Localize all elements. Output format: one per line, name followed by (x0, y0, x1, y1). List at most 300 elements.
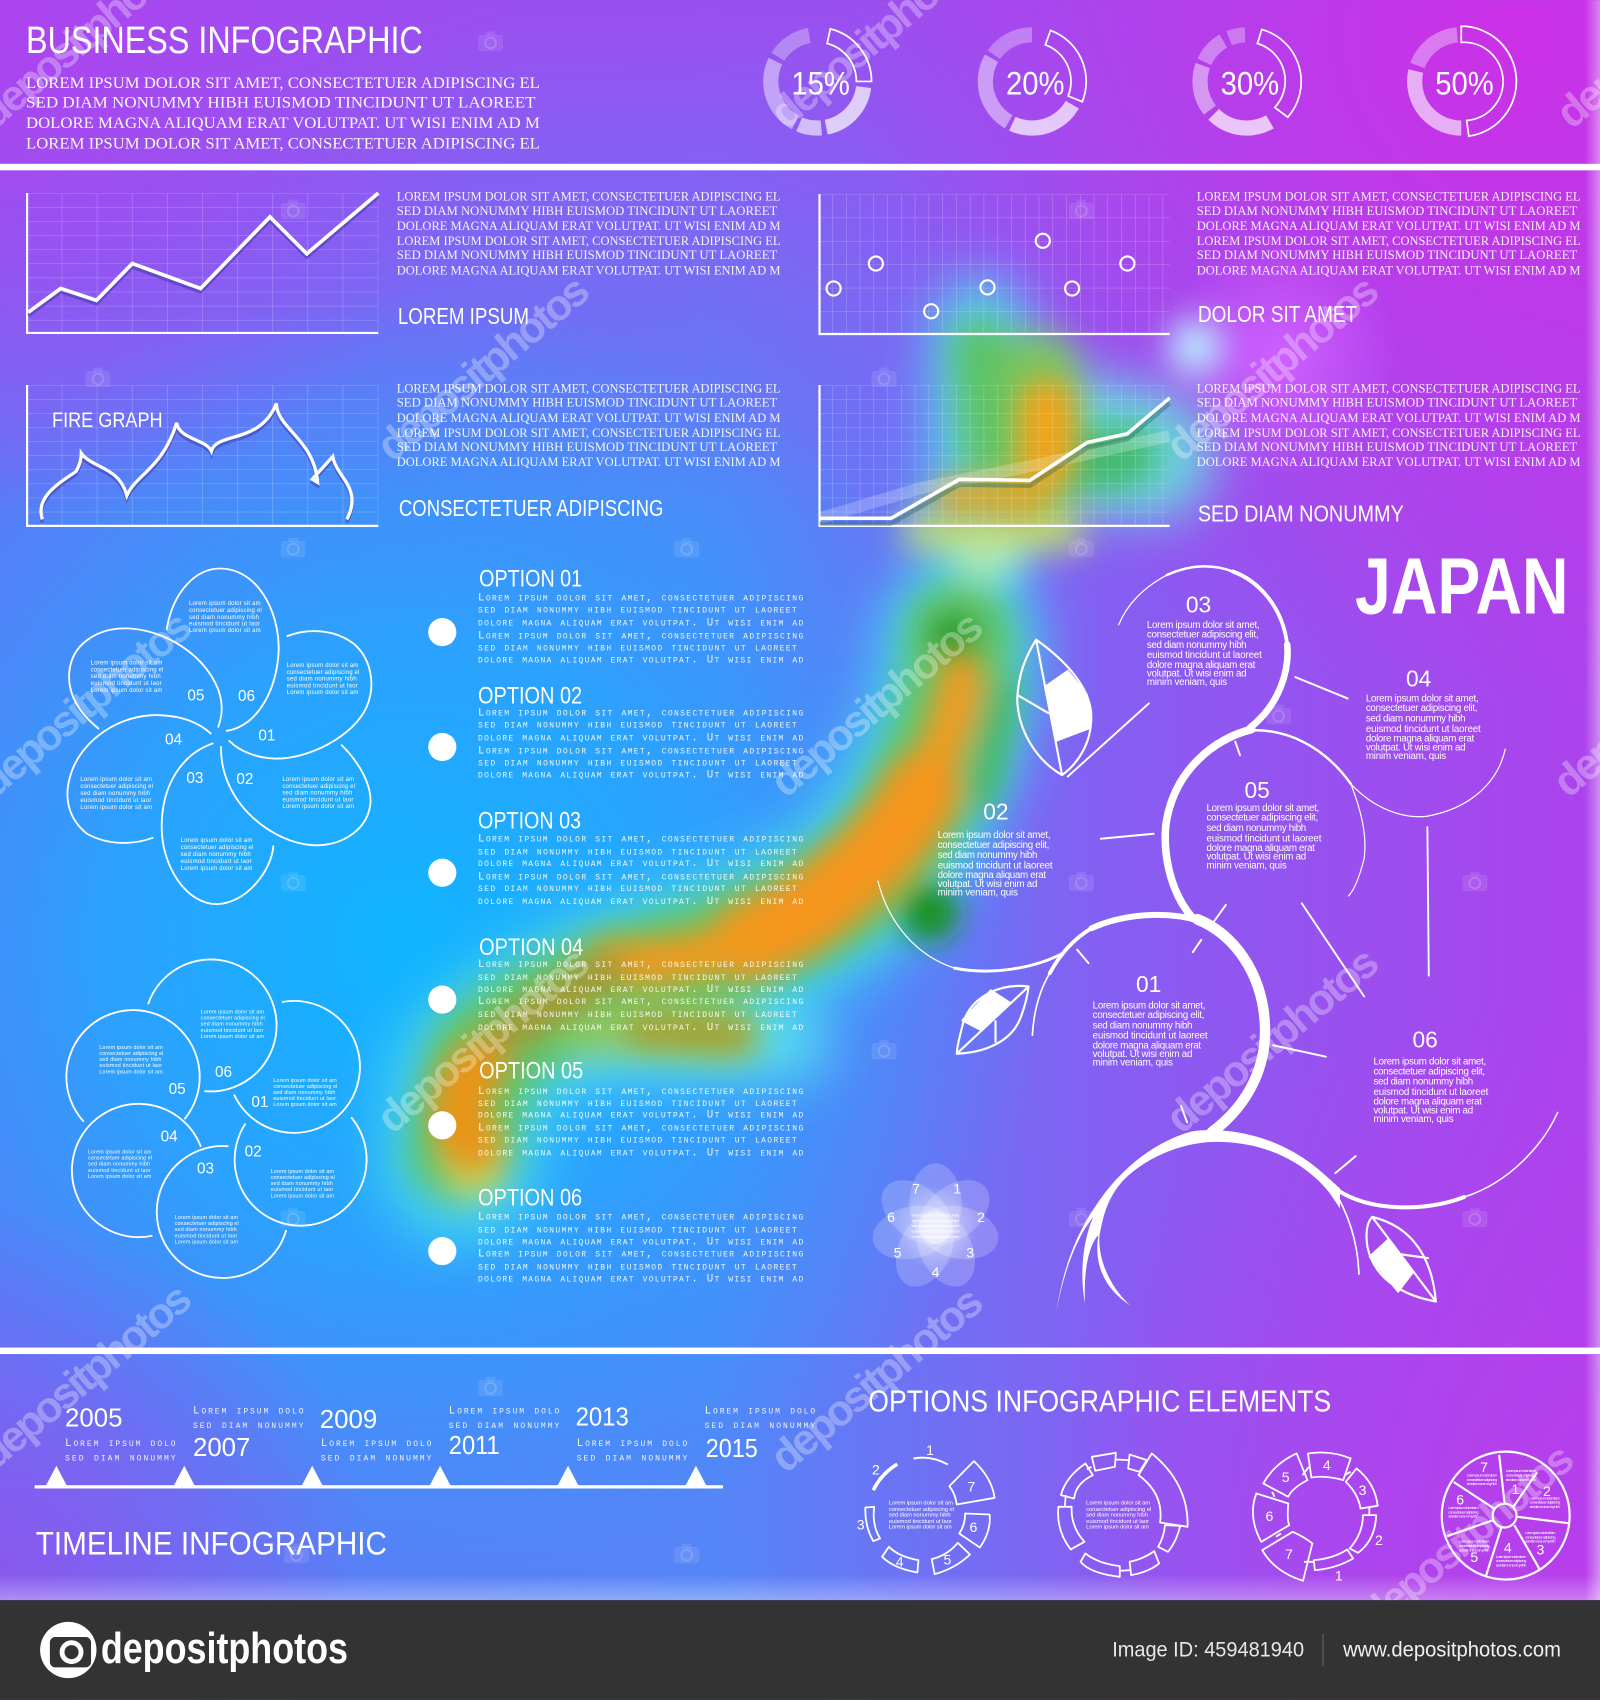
donut 30%: 30% (1221, 65, 1279, 101)
circle flower diagram: Lorem ipsum dolor sit am (201, 1010, 265, 1016)
option 01: sed diam nonummy hibh euismod tincidunt ut laoreet (478, 643, 797, 655)
circle flower diagram: 05 (169, 1081, 186, 1098)
text block 1: SED DIAM NONUMMY HIBH EUISMOD TINCIDUNT UT LAOREET (397, 247, 777, 262)
option 01: sed diam nonummy hibh euismod tincidunt ut laoreet (478, 605, 797, 617)
text block 1: DOLORE MAGNA ALIQUAM ERAT VOLUTPAT. UT WISI ENIM AD M (397, 262, 781, 277)
tree text 03: sed diam nonummy hibh (1147, 640, 1247, 651)
option ring 3: 4 (1323, 1457, 1331, 1473)
donut 50%: 50% (1435, 65, 1494, 101)
option 03: Lorem ipsum dolor sit amet, consectetuer adipiscing (478, 871, 803, 883)
circle flower diagram: euismod tincidunt ut laor (175, 1234, 238, 1240)
option 01: Lorem ipsum dolor sit amet, consectetuer adipiscing (478, 631, 803, 643)
circle flower diagram: euismod tincidunt ut laor (88, 1168, 151, 1174)
website: www.depositphotos.com (1342, 1637, 1561, 1662)
petal flower diagram: Lorem ipsum dolor sit am (287, 690, 358, 696)
timeline 2009: Lorem ipsum dolo (321, 1438, 432, 1450)
option ring 4: Lorem ipsum dolor sit am (1496, 1554, 1526, 1559)
icon: leaf bottom (1367, 1217, 1436, 1301)
tree text 06: Lorem ipsum dolor sit amet, (1373, 1057, 1486, 1068)
header title: BUSINESS INFOGRAPHIC (26, 20, 423, 62)
bottom divider (0, 1348, 1600, 1354)
option 02 (428, 683, 803, 781)
text block 2 (1197, 189, 1581, 277)
heat map: Japan silhouette (460, 325, 1215, 1176)
petal flower diagram: euismod tincidunt ut laor (189, 621, 260, 627)
icon: leaf top (1017, 640, 1091, 775)
donut 30% (1200, 29, 1301, 128)
option ring 4: sed diam nonummy hibh (1530, 1504, 1560, 1509)
tree text 03: minim veniam, quis (1147, 677, 1227, 688)
option 05: sed diam nonummy hibh euismod tincidunt ut laoreet (478, 1098, 797, 1110)
option 02: dolore magna aliquam erat volutpat. Ut wisi enim ad (478, 769, 803, 781)
option ring 3: 5 (1282, 1469, 1290, 1485)
tree text 03 (1147, 592, 1262, 688)
circle flower diagram: euismod tincidunt ut laor (99, 1063, 162, 1069)
timeline (35, 1402, 815, 1488)
tree text 01 (1093, 971, 1208, 1069)
icon: leaf middle (957, 986, 1029, 1054)
tree text 05: Lorem ipsum dolor sit amet, (1207, 803, 1319, 814)
option ring 4: Lorem ipsum dolor sit am (1459, 1539, 1489, 1544)
timeline 2011 (449, 1406, 560, 1460)
petal flower diagram: Lorem ipsum dolor sit am (282, 804, 354, 810)
petal flower diagram: Lorem ipsum dolor sit am (282, 777, 354, 783)
option ring 1 (857, 1442, 995, 1574)
tree text 03: 03 (1186, 592, 1211, 618)
watermarks: depositphotos (761, 1277, 992, 1482)
option ring 1: 1 (926, 1442, 934, 1458)
option ring 1: 3 (857, 1517, 865, 1533)
option 01: dolore magna aliquam erat volutpat. Ut wisi enim ad (478, 654, 803, 666)
tree text 05: consectetuer adipiscing elit, (1207, 813, 1318, 824)
option 03 (428, 807, 803, 908)
option ring 4: 5 (1470, 1549, 1478, 1565)
option ring 1: 4 (896, 1554, 904, 1570)
petal flower diagram: Lorem ipsum dolor sit am (181, 838, 252, 844)
circle flower diagram: Lorem ipsum dolor sit am (271, 1169, 335, 1175)
watermarks: depositphotos (1352, 1435, 1583, 1639)
options heading: OPTIONS INFOGRAPHIC ELEMENTS (868, 1386, 1331, 1419)
tree text 03: dolore magna aliquam erat (1147, 660, 1256, 671)
circle flower diagram: Lorem ipsum dolor sit am (201, 1034, 265, 1040)
text block 2: SED DIAM NONUMMY HIBH EUISMOD TINCIDUNT UT LAOREET (1197, 203, 1577, 218)
option 03: dolore magna aliquam erat volutpat. Ut wisi enim ad (478, 896, 803, 908)
tree text 04: dolore magna aliquam erat (1366, 734, 1475, 745)
option ring 4: consectetuer adipiscing (1525, 1534, 1556, 1539)
tree text 05 (1207, 777, 1322, 871)
timeline 2007: 2007 (193, 1432, 250, 1462)
tree text 04 (1366, 665, 1481, 762)
petal flower diagram: euismod tincidunt ut laor (282, 797, 353, 803)
tree text 02: volutpat. Ut wisi enim ad (938, 879, 1037, 890)
tree text 04: euismod tincidunt ut laoreet (1366, 724, 1481, 735)
option ring 4 (1442, 1452, 1570, 1580)
circle flower diagram: sed diam nonummy hibh (273, 1090, 335, 1096)
option 04: dolore magna aliquam erat volutpat. Ut wisi enim ad (478, 1022, 803, 1034)
circle flower diagram: Lorem ipsum dolor sit am (99, 1045, 163, 1051)
option ring 3: 6 (1265, 1508, 1273, 1524)
text block 2: DOLORE MAGNA ALIQUAM ERAT VOLUTPAT. UT WISI ENIM AD M (1197, 218, 1581, 233)
circle flower diagram: consectetuer adipiscing el (271, 1175, 335, 1181)
circle flower diagram: Lorem ipsum dolor sit am (99, 1070, 163, 1076)
text block 4: DOLORE MAGNA ALIQUAM ERAT VOLUTPAT. UT WISI ENIM AD M (1197, 454, 1581, 469)
petal flower diagram: sed diam nonummy hibh (189, 615, 259, 621)
tree text 01: sed diam nonummy hibh (1093, 1020, 1192, 1031)
text block 1: SED DIAM NONUMMY HIBH EUISMOD TINCIDUNT UT LAOREET (397, 203, 777, 218)
option 05: Lorem ipsum dolor sit amet, consectetuer adipiscing (478, 1086, 803, 1098)
petal flower diagram: consectetuer adipiscing el (80, 784, 153, 790)
tree text 04: minim veniam, quis (1366, 751, 1446, 762)
option 02: OPTION 02 (478, 683, 582, 710)
option ring 1: 5 (944, 1551, 952, 1567)
option ring 4: 3 (1536, 1542, 1544, 1558)
donut 15%: 15% (791, 65, 850, 101)
petal flower diagram: consectetuer adipiscing el (287, 670, 359, 676)
text block 4: SED DIAM NONUMMY HIBH EUISMOD TINCIDUNT UT LAOREET (1197, 395, 1577, 410)
option ring 2: consectetuer adipiscing el (1086, 1507, 1151, 1513)
tree text 06: volutpat. Ut wisi enim ad (1373, 1105, 1473, 1116)
option ring 4: Lorem ipsum dolor sit am (1467, 1473, 1497, 1478)
watermarks: depositphotos (761, 602, 992, 807)
label: dolor sit amet: DOLOR SIT AMET (1198, 301, 1357, 327)
fire graph (27, 385, 378, 526)
option ring 1: consectetuer adipiscing el (889, 1507, 954, 1513)
tree text 06 (1373, 1026, 1489, 1125)
option ring 4: Lorem ipsum dolor sit am (1506, 1468, 1536, 1473)
circle flower diagram: Lorem ipsum dolor sit am (88, 1174, 152, 1180)
small translucent flower: consectetuer adipiscing elit sed (912, 1218, 959, 1223)
tree text 03: Lorem ipsum dolor sit amet, (1147, 620, 1260, 631)
text block 4: LOREM IPSUM DOLOR SIT AMET, CONSECTETUER ADIPISCING EL (1197, 425, 1581, 440)
tree text 04: 04 (1406, 665, 1431, 691)
tree text 05: minim veniam, quis (1207, 860, 1287, 871)
option 03: dolore magna aliquam erat volutpat. Ut wisi enim ad (478, 858, 803, 870)
tree text 06: consectetuer adipiscing elit, (1373, 1066, 1485, 1077)
small translucent flower: 2 (977, 1209, 985, 1225)
option 02: dolore magna aliquam erat volutpat. Ut wisi enim ad (478, 733, 803, 745)
text block 2: LOREM IPSUM DOLOR SIT AMET, CONSECTETUER ADIPISCING EL (1197, 189, 1581, 204)
tree text 02: minim veniam, quis (938, 888, 1018, 899)
option ring 2: Lorem ipsum dolor sit am (1086, 1501, 1150, 1507)
circle flower diagram: Lorem ipsum dolor sit am (175, 1240, 239, 1246)
circle flower diagram: Lorem ipsum dolor sit am (273, 1102, 337, 1108)
tree text 06: dolore magna aliquam erat (1373, 1097, 1482, 1108)
option 02: sed diam nonummy hibh euismod tincidunt ut laoreet (478, 720, 797, 732)
tree text 06: sed diam nonummy hibh (1373, 1077, 1473, 1088)
label: consectetuer adipiscing: CONSECTETUER ADIPISCING (399, 495, 663, 521)
option 04 (428, 934, 803, 1034)
option 06: Lorem ipsum dolor sit amet, consectetuer adipiscing (478, 1212, 803, 1224)
tree text 04: sed diam nonummy hibh (1366, 714, 1466, 725)
text block 3: DOLORE MAGNA ALIQUAM ERAT VOLUTPAT. UT WISI ENIM AD M (397, 454, 781, 469)
petal flower diagram: sed diam nonummy hibh (91, 674, 161, 680)
option ring 4: sed diam nonummy hibh (1506, 1477, 1536, 1482)
option 02: Lorem ipsum dolor sit amet, consectetuer adipiscing (478, 746, 803, 758)
small translucent flower: Lorem ipsum dolor sit amet consec (912, 1212, 959, 1217)
footer bar (0, 1600, 1600, 1700)
option ring 4: 6 (1456, 1492, 1464, 1508)
tree text 01: dolore magna aliquam erat (1093, 1040, 1201, 1051)
circle flower diagram: Lorem ipsum dolor sit am (273, 1078, 337, 1084)
option ring 4: Lorem ipsum dolor sit am (1525, 1530, 1556, 1535)
text block 1 (397, 189, 781, 277)
tree text 05: sed diam nonummy hibh (1207, 823, 1306, 834)
option ring 4: 1 (1512, 1481, 1520, 1497)
petal flower diagram: Lorem ipsum dolor sit am (189, 601, 261, 607)
header paragraph: DOLORE MAGNA ALIQUAM ERAT VOLUTPAT. UT WISI ENIM AD M (26, 115, 540, 132)
petal flower diagram: Lorem ipsum dolor sit am (181, 866, 252, 872)
small translucent flower: 1 (953, 1181, 961, 1197)
scatter chart (818, 194, 1170, 334)
text block 4 (1197, 381, 1581, 469)
option ring 4: sed diam nonummy hibh (1467, 1481, 1497, 1486)
petal flower diagram: 05 (187, 687, 204, 704)
option 04: sed diam nonummy hibh euismod tincidunt ut laoreet (478, 1009, 797, 1021)
option ring 2: Lorem ipsum dolor sit am (1086, 1525, 1149, 1531)
circle flower diagram: euismod tincidunt ut laor (201, 1028, 264, 1034)
tree diagram (878, 566, 1558, 1310)
watermarks: depositphotos (368, 938, 599, 1143)
circle flower diagram: euismod tincidunt ut laor (271, 1187, 334, 1193)
label: lorem ipsum: LOREM IPSUM (398, 303, 529, 329)
tree text 02: sed diam nonummy hibh (938, 850, 1037, 861)
petal flower diagram: Lorem ipsum dolor sit am (91, 688, 162, 694)
tree text 04: Lorem ipsum dolor sit amet, (1366, 693, 1479, 704)
text block 2: DOLORE MAGNA ALIQUAM ERAT VOLUTPAT. UT WISI ENIM AD M (1197, 262, 1581, 277)
petal flower diagram: Lorem ipsum dolor sit am (287, 663, 358, 669)
circle flower diagram: Lorem ipsum dolor sit am (88, 1150, 152, 1156)
timeline 2013: Lorem ipsum dolo (577, 1438, 687, 1450)
timeline 2007 (193, 1406, 304, 1462)
timeline 2015: 2015 (706, 1433, 758, 1463)
tree text 02: euismod tincidunt ut laoreet (938, 860, 1053, 871)
option 04: sed diam nonummy hibh euismod tincidunt ut laoreet (478, 972, 797, 984)
option 05: OPTION 05 (479, 1058, 583, 1085)
donut 50% (1415, 26, 1516, 136)
option ring 1: 2 (872, 1461, 880, 1477)
watermarks: depositphotos (1157, 938, 1388, 1143)
tree text 02 (938, 799, 1053, 899)
option 04: Lorem ipsum dolor sit amet, consectetuer adipiscing (478, 959, 803, 971)
circle flower diagram: euismod tincidunt ut laor (273, 1096, 336, 1102)
option ring 1: Lorem ipsum dolor sit am (889, 1501, 953, 1507)
tree text 06: 06 (1412, 1026, 1438, 1052)
option 02: sed diam nonummy hibh euismod tincidunt ut laoreet (478, 757, 797, 769)
line chart (27, 193, 378, 333)
tree text 03: consectetuer adipiscing elit, (1147, 630, 1259, 641)
text block 1: LOREM IPSUM DOLOR SIT AMET, CONSECTETUER ADIPISCING EL (397, 189, 781, 204)
option 04: OPTION 04 (479, 934, 583, 961)
tree text 05: euismod tincidunt ut laoreet (1207, 833, 1322, 844)
small translucent flower: 7 (912, 1181, 920, 1197)
donut 20%: 20% (1006, 65, 1064, 101)
text block 3: LOREM IPSUM DOLOR SIT AMET, CONSECTETUER ADIPISCING EL (397, 425, 781, 440)
circle flower diagram: sed diam nonummy hibh (99, 1057, 161, 1063)
header paragraph (26, 75, 540, 153)
circle flower diagram: 04 (161, 1129, 178, 1146)
option ring 4: sed diam nonummy hibh (1525, 1539, 1556, 1544)
timeline 2011: Lorem ipsum dolo (449, 1406, 560, 1418)
petal flower diagram: Lorem ipsum dolor sit am (80, 777, 152, 783)
option ring 3: 1 (1335, 1568, 1343, 1584)
image id: Image ID: 459481940 (1112, 1637, 1304, 1662)
text block 4: SED DIAM NONUMMY HIBH EUISMOD TINCIDUNT UT LAOREET (1197, 439, 1577, 454)
timeline 2005 (65, 1403, 176, 1464)
tree text 04: volutpat. Ut wisi enim ad (1366, 742, 1466, 753)
text block 3: LOREM IPSUM DOLOR SIT AMET, CONSECTETUER ADIPISCING EL (397, 381, 781, 396)
timeline 2007: sed diam nonummy (193, 1420, 304, 1432)
timeline 2013: 2013 (576, 1402, 629, 1432)
timeline 2007: Lorem ipsum dolo (193, 1406, 304, 1418)
tree text 02: 02 (983, 799, 1009, 825)
header paragraph: LOREM IPSUM DOLOR SIT AMET, CONSECTETUER ADIPISCING EL (26, 75, 540, 92)
header paragraph: SED DIAM NONUMMY HIBH EUISMOD TINCIDUNT UT LAOREET (26, 94, 536, 111)
watermarks: depositphotos (1157, 266, 1388, 471)
small translucent flower: 5 (894, 1245, 902, 1261)
small translucent flower (867, 1163, 1004, 1296)
petal flower diagram: Lorem ipsum dolor sit am (80, 805, 152, 811)
petal flower diagram: sed diam nonummy hibh (282, 790, 352, 796)
petal flower diagram: Lorem ipsum dolor sit am (189, 628, 261, 634)
petal flower diagram: consectetuer adipiscing el (189, 608, 262, 614)
text block 3: DOLORE MAGNA ALIQUAM ERAT VOLUTPAT. UT WISI ENIM AD M (397, 410, 781, 425)
petal flower diagram: 06 (238, 688, 255, 705)
text block 2: LOREM IPSUM DOLOR SIT AMET, CONSECTETUER ADIPISCING EL (1197, 233, 1581, 248)
option ring 2: sed diam nonummy hibh (1086, 1513, 1148, 1519)
option ring 4: Lorem ipsum dolor sit am (1448, 1505, 1479, 1510)
option ring 2: euismod tincidunt ut laor (1086, 1519, 1149, 1525)
option 01: Lorem ipsum dolor sit amet, consectetuer adipiscing (478, 593, 803, 605)
header paragraph: LOREM IPSUM DOLOR SIT AMET, CONSECTETUER ADIPISCING EL (26, 136, 540, 153)
small translucent flower: 6 (887, 1209, 895, 1225)
circle flower diagram: consectetuer adipiscing el (88, 1156, 152, 1162)
tree text 01: minim veniam, quis (1093, 1058, 1173, 1069)
trend chart (818, 385, 1170, 526)
option 05: dolore magna aliquam erat volutpat. Ut wisi enim ad (478, 1148, 803, 1160)
option ring 4: consectetuer adipiscing (1467, 1477, 1497, 1482)
petal flower diagram: sed diam nonummy hibh (80, 791, 150, 797)
label: sed diam nonummy: SED DIAM NONUMMY (1198, 501, 1404, 527)
option ring 4: 7 (1480, 1459, 1488, 1475)
petal flower diagram: 04 (165, 731, 183, 748)
small translucent flower: 4 (932, 1264, 940, 1280)
tree text 03: euismod tincidunt ut laoreet (1147, 650, 1262, 661)
small translucent flower: euismod tincidunt ut laoreet dol (912, 1229, 959, 1234)
timeline 2013 (576, 1402, 687, 1464)
circle flower diagram: consectetuer adipiscing el (273, 1084, 337, 1090)
timeline 2005: Lorem ipsum dolo (65, 1438, 176, 1450)
option ring 4: consectetuer adipiscing (1530, 1500, 1560, 1505)
circle flower diagram: consectetuer adipiscing el (175, 1221, 239, 1227)
option 06: Lorem ipsum dolor sit amet, consectetuer adipiscing (478, 1249, 803, 1261)
tree text 06: minim veniam, quis (1373, 1114, 1454, 1125)
watermarks: depositphotos (368, 266, 599, 471)
tree text 01: 01 (1136, 971, 1161, 997)
tree text 02: dolore magna aliquam erat (938, 870, 1046, 881)
tree text 05: volutpat. Ut wisi enim ad (1207, 852, 1306, 863)
option list (428, 566, 803, 1285)
option ring 4: consectetuer adipiscing (1459, 1543, 1489, 1548)
option ring 4: Lorem ipsum dolor sit am (1530, 1495, 1560, 1500)
circle flower diagram: sed diam nonummy hibh (88, 1162, 150, 1168)
circle flower diagram: sed diam nonummy hibh (201, 1022, 263, 1028)
tree text 04: consectetuer adipiscing elit, (1366, 703, 1478, 714)
tree text 02: Lorem ipsum dolor sit amet, (938, 830, 1050, 841)
petal flower diagram: sed diam nonummy hibh (181, 852, 251, 858)
small translucent flower: Lorem ipsum dolor sit amet consec (912, 1234, 959, 1239)
option 02: Lorem ipsum dolor sit amet, consectetuer adipiscing (478, 708, 803, 720)
option ring 4: sed diam nonummy hibh (1459, 1547, 1489, 1552)
petal flower diagram: 03 (186, 770, 203, 787)
petal flower diagram: consectetuer adipiscing el (91, 667, 163, 673)
tree text 03: volutpat. Ut wisi enim ad (1147, 669, 1247, 680)
tree text 01: Lorem ipsum dolor sit amet, (1093, 1000, 1205, 1011)
timeline 2009 (320, 1404, 432, 1464)
tree branches (878, 566, 1558, 1274)
text block 3: SED DIAM NONUMMY HIBH EUISMOD TINCIDUNT UT LAOREET (397, 439, 777, 454)
option ring 1: 7 (967, 1479, 975, 1495)
option 06: OPTION 06 (478, 1185, 582, 1212)
option ring 2 (1058, 1453, 1188, 1577)
option ring 4: consectetuer adipiscing (1496, 1558, 1526, 1563)
text block 4: LOREM IPSUM DOLOR SIT AMET, CONSECTETUER ADIPISCING EL (1197, 381, 1581, 396)
timeline 2005: 2005 (65, 1403, 122, 1433)
option ring 1: 6 (970, 1519, 978, 1535)
timeline 2009: sed diam nonummy (321, 1452, 432, 1464)
petal flower diagram (67, 568, 371, 904)
tree text 05: 05 (1244, 777, 1270, 803)
option 06: dolore magna aliquam erat volutpat. Ut wisi enim ad (478, 1273, 803, 1285)
option ring 1: sed diam nonummy hibh (889, 1513, 951, 1519)
option ring 4: consectetuer adipiscing (1506, 1473, 1536, 1478)
circle flower diagram (66, 959, 367, 1278)
option 05: sed diam nonummy hibh euismod tincidunt ut laoreet (478, 1135, 797, 1147)
text block 3 (397, 381, 781, 469)
option 06: sed diam nonummy hibh euismod tincidunt ut laoreet (478, 1225, 797, 1237)
text block 4: DOLORE MAGNA ALIQUAM ERAT VOLUTPAT. UT WISI ENIM AD M (1197, 410, 1581, 425)
timeline 2015: Lorem ipsum dolo (705, 1406, 815, 1418)
option 01 (428, 566, 803, 666)
option ring 3: 3 (1359, 1482, 1367, 1498)
donut 15% (771, 29, 872, 128)
circle flower diagram: Lorem ipsum dolor sit am (175, 1215, 239, 1221)
circle flower diagram: 01 (251, 1094, 268, 1111)
tree roots and lower arc (1057, 1130, 1340, 1310)
option 06: sed diam nonummy hibh euismod tincidunt ut laoreet (478, 1262, 797, 1274)
text block 3: SED DIAM NONUMMY HIBH EUISMOD TINCIDUNT UT LAOREET (397, 395, 777, 410)
circle flower diagram: 02 (245, 1144, 262, 1161)
circle flower diagram: 06 (215, 1064, 232, 1081)
small translucent flower: 3 (966, 1245, 974, 1261)
option 01: OPTION 01 (479, 566, 582, 593)
petal flower diagram: 01 (258, 727, 275, 744)
timeline 2013: sed diam nonummy (577, 1452, 687, 1464)
tree text 06: euismod tincidunt ut laoreet (1373, 1087, 1489, 1098)
tree text 01: consectetuer adipiscing elit, (1093, 1010, 1204, 1021)
circle flower diagram: 03 (197, 1161, 214, 1178)
tree text 01: volutpat. Ut wisi enim ad (1093, 1049, 1192, 1060)
petal flower diagram: euismod tincidunt ut laor (287, 683, 358, 689)
option ring 1: Lorem ipsum dolor sit am (889, 1525, 952, 1531)
option ring 3 (1253, 1453, 1383, 1584)
tree text 05: dolore magna aliquam erat (1207, 843, 1315, 854)
option ring 3: 7 (1285, 1546, 1293, 1562)
circle flower diagram: consectetuer adipiscing el (201, 1016, 265, 1022)
timeline heading: TIMELINE INFOGRAPHIC (36, 1526, 387, 1562)
petal flower diagram: sed diam nonummy hibh (287, 676, 357, 682)
option 01: dolore magna aliquam erat volutpat. Ut wisi enim ad (478, 618, 803, 630)
timeline 2015: sed diam nonummy (705, 1420, 815, 1432)
